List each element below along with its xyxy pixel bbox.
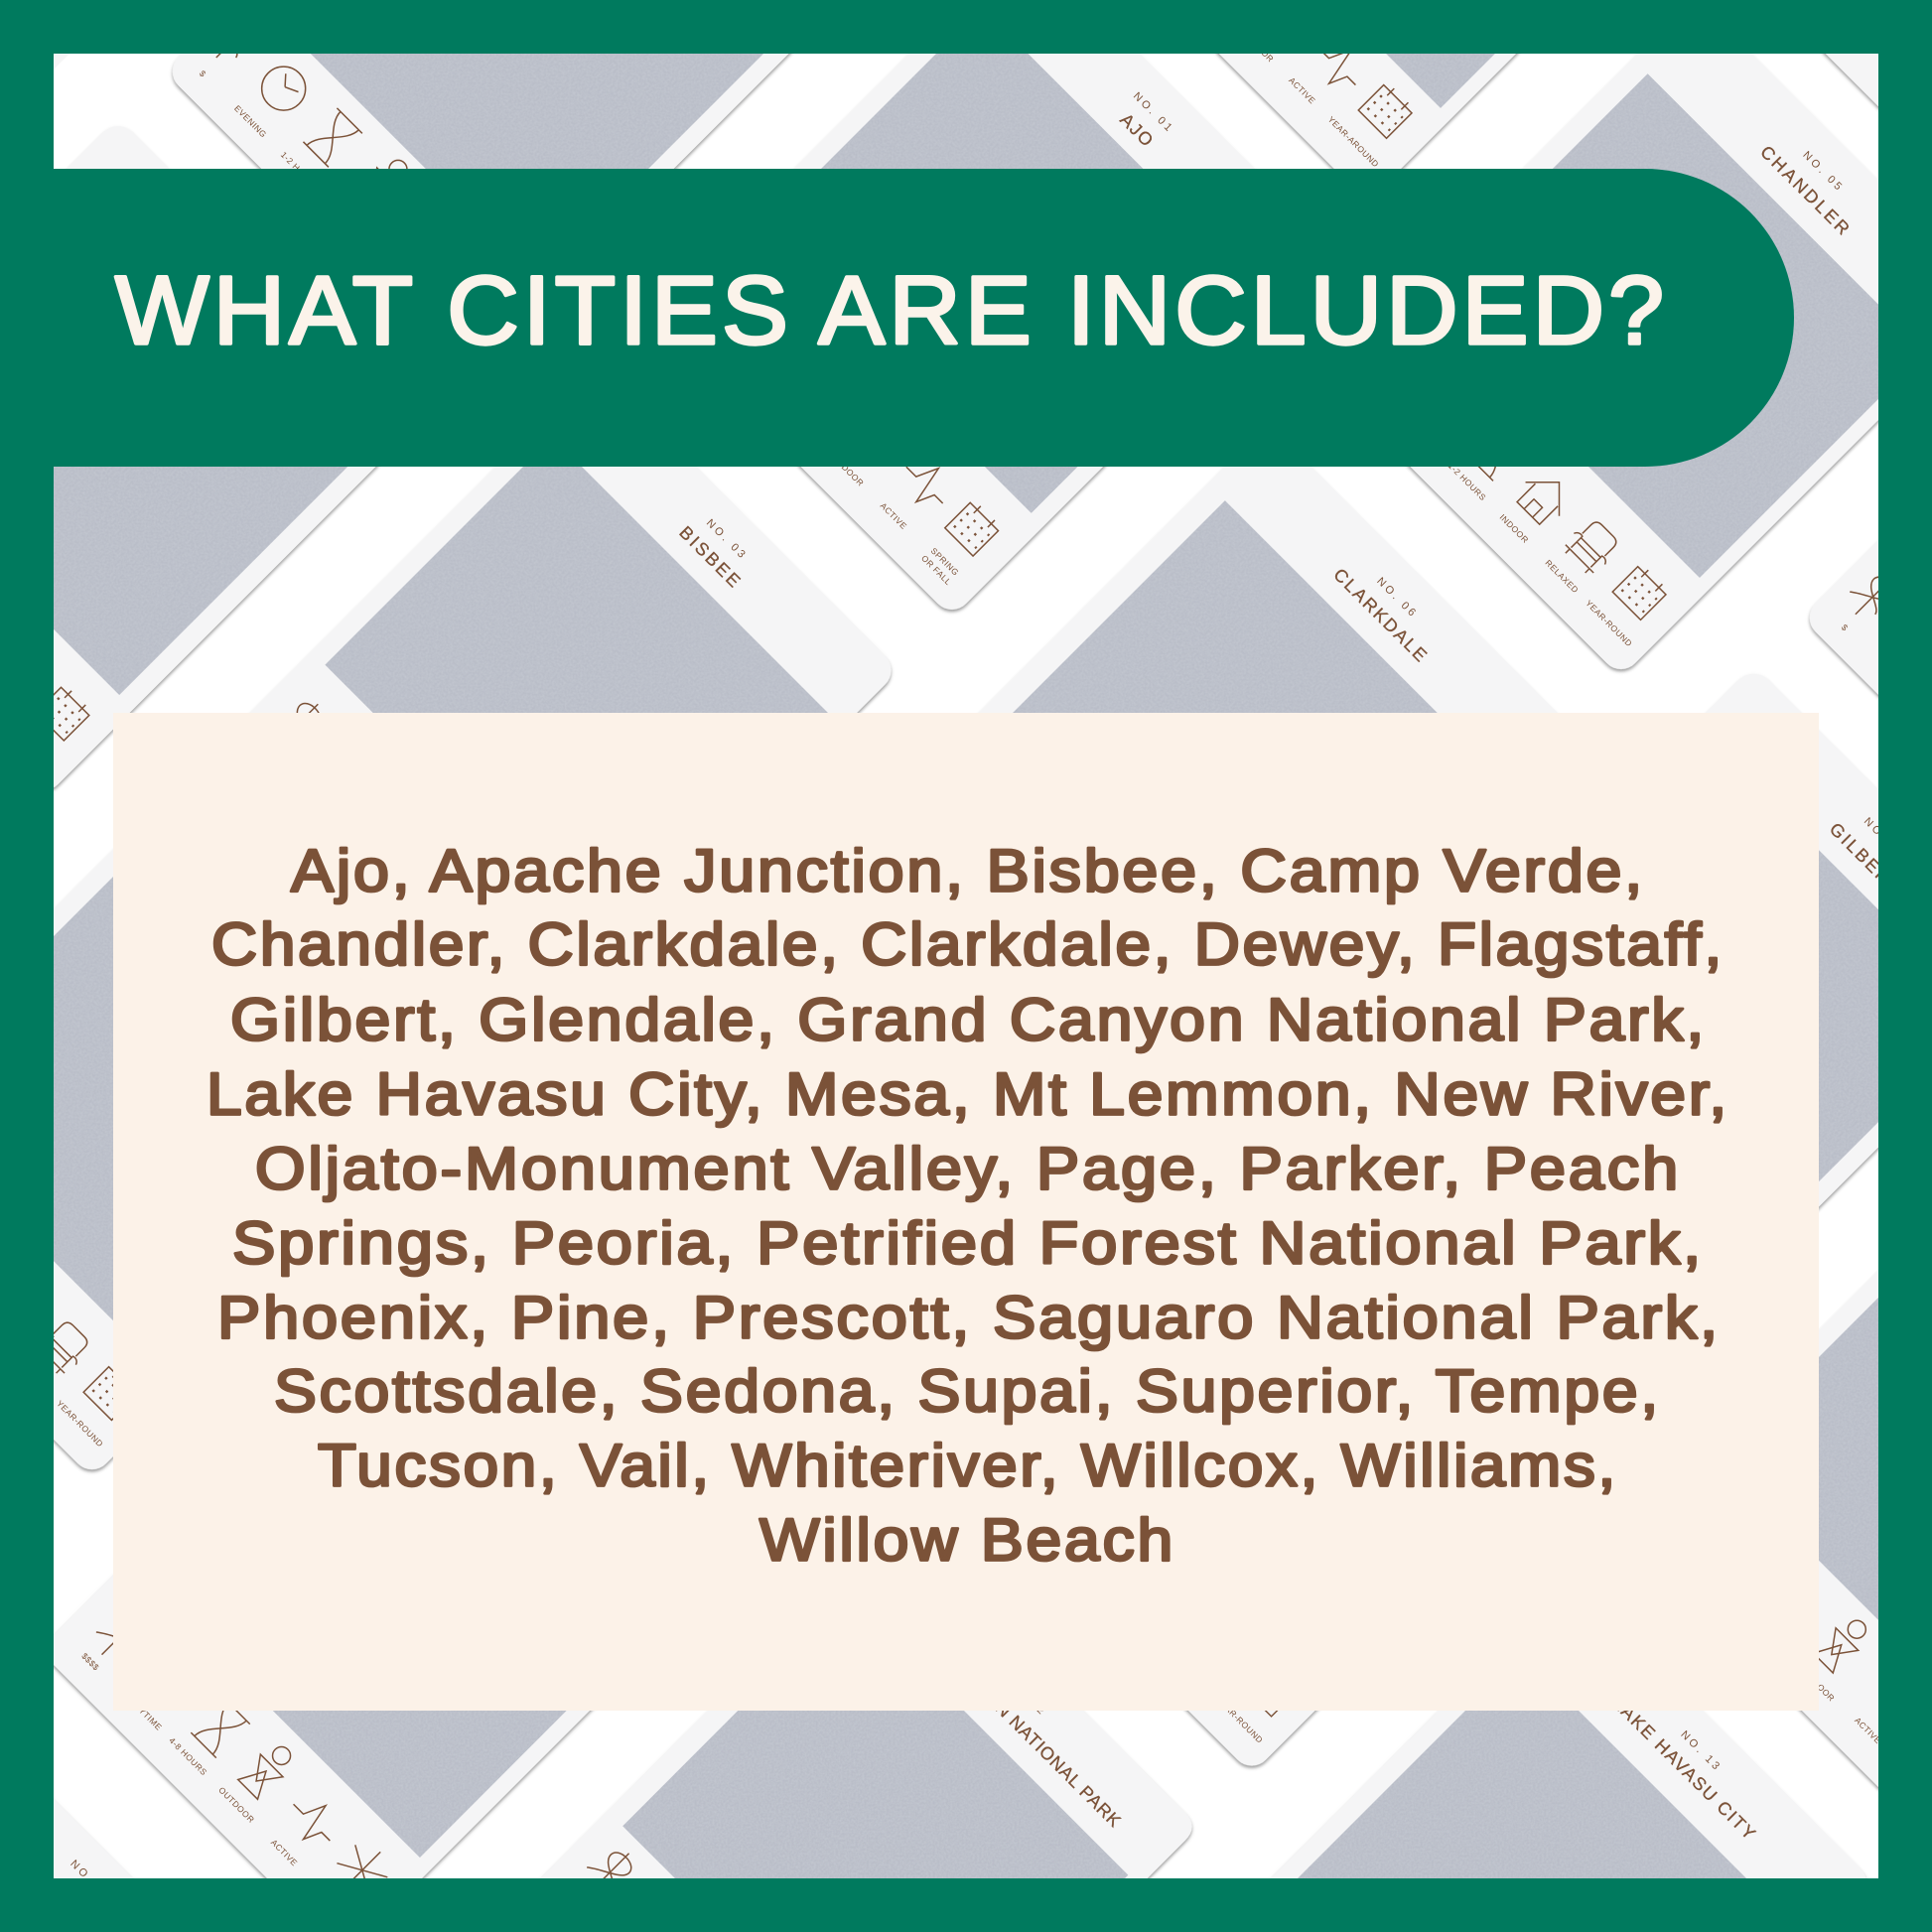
card: year-round tip, bottom: YEAR-ROUND: [1214, 1695, 1265, 1745]
text block: cities: Phoenix, Pine, Prescott, Saguaro National Park,: [217, 1285, 1721, 1350]
card: No. 10 Gilbert: [1706, 673, 1878, 1212]
card: outdoor active, bottom left: ACTIVE: [269, 1838, 300, 1868]
card: top right corner: [1821, 54, 1878, 111]
card: No. 05 Chandler: NO. 05: [1800, 149, 1846, 195]
card: No. 05 Chandler: [1405, 54, 1878, 673]
card: outdoor active, right edge: ACTIVE: [1853, 1716, 1883, 1745]
card: No. 06 Clarkdale: [979, 467, 1557, 713]
card: No. 03 Bisbee: BISBEE: [675, 522, 745, 591]
card: evening activity: 1-2 HOURS: [279, 150, 321, 192]
card: No. 01 Ajo: [794, 54, 1255, 614]
card: No. 01 Ajo: OR FALL: [919, 553, 953, 587]
card: No. 05 Chandler: RELAXED: [1544, 558, 1581, 595]
card: No. 12 Grand Canyon National Park: [540, 1711, 1193, 1878]
card: outdoor active, bottom left: OUTDOOR: [216, 1785, 256, 1825]
card: No. 09, bottom left corner: NO. 09: [68, 1858, 113, 1903]
card: No. 13 Lake Havasu City: [1271, 1711, 1867, 1878]
card: year-round tip, bottom: [1183, 1711, 1320, 1770]
card: right column, money icon: $: [1840, 622, 1851, 633]
text block: cities: Springs, Peoria, Petrified Forest National Park,: [232, 1209, 1704, 1277]
card: No. 10 Gilbert: NO. 10: [1862, 815, 1907, 861]
card: outdoor active, bottom left: $$$$: [79, 1651, 101, 1673]
text block: cities: Gilbert, Glendale, Grand Canyon National Park,: [230, 987, 1707, 1052]
text block: cities: Ajo, Apache Junction, Bisbee, Camp Verde,: [291, 838, 1645, 903]
card: evening activity: [171, 54, 794, 169]
card: No. 13 Lake Havasu City: NO. 13: [1678, 1728, 1724, 1774]
card: No. 12 Grand Canyon National Park: NO. 12: [1004, 1673, 1049, 1719]
card: No. 09, bottom left corner: [54, 1799, 133, 1878]
card: evening activity: EVENING: [232, 103, 269, 140]
card: outdoor active, bottom left: ANYTIME: [128, 1697, 164, 1732]
card: evening activity: $: [198, 69, 208, 79]
card: outdoor active, right edge: OUTDOOR: [1797, 1664, 1837, 1704]
card: outdoor active, bottom left: 4-8 HOURS: [167, 1735, 209, 1777]
card: No. 05 Chandler: 1-2 HOURS: [1447, 461, 1488, 502]
card: No. 13 Lake Havasu City: LAKE HAVASU CITY: [1609, 1694, 1759, 1844]
text block: cities: Tucson, Vail, Whiteriver, Willcox, Williams,: [318, 1432, 1618, 1499]
card: left column, lower: [54, 126, 381, 792]
card: No. 05 Chandler: INDOOR: [1498, 512, 1531, 545]
text block: cities: Lake Havasu City, Mesa, Mt Lemmon, New River,: [207, 1060, 1729, 1128]
text block: cities: [207, 838, 1729, 1573]
card: outdoor active, right edge: [1797, 1271, 1878, 1792]
card: No. 01 Ajo: NO. 01: [1131, 90, 1176, 136]
card: year-around: ACTIVE: [1287, 75, 1317, 106]
card: No. 01 Ajo: OUTDOOR: [826, 449, 866, 488]
text block: cities: Chandler, Clarkdale, Clarkdale, Dewey, Flagstaff,: [211, 911, 1725, 977]
card: No. 12 Grand Canyon National Park: GRAND CANYON NATIONAL PARK: [892, 1597, 1125, 1831]
text block: cities: Willow Beach: [759, 1507, 1175, 1573]
card: No. 01 Ajo: AJO: [1116, 109, 1157, 150]
card: year-around: [1213, 54, 1521, 169]
card: No. 03 Bisbee: NO. 03: [704, 517, 750, 563]
card: No. 01 Ajo: ACTIVE: [879, 500, 909, 531]
card: outdoor active, bottom left: [54, 1575, 595, 1878]
title: WHAT CITIES ARE INCLUDED?: [115, 256, 1668, 364]
text block: cities: Scottsdale, Sedona, Supai, Superior, Tempe,: [274, 1358, 1661, 1424]
card: year-around: OUTDOOR: [1236, 24, 1276, 65]
text block: cities: Oljato-Monument Valley, Page, Parker, Peach: [255, 1136, 1681, 1201]
banner: title ribbon: [0, 169, 1794, 467]
card: left column, armchair: YEAR-ROUND: [55, 1399, 105, 1449]
card: No. 06 Clarkdale: NO. 06: [1374, 576, 1420, 621]
card: No. 10 Gilbert: GILBERT: [1826, 819, 1903, 897]
card: year-around: YEAR-AROUND: [1326, 114, 1381, 170]
card: No. 06 Clarkdale: CLARKDALE: [1329, 565, 1431, 665]
card: No. 01 Ajo: SPRING: [929, 546, 961, 578]
card: right column, money icon: [1807, 540, 1878, 700]
panel: city list: [113, 713, 1819, 1711]
card: No. 05 Chandler: YEAR-ROUND: [1584, 598, 1634, 648]
card: left column, armchair: [54, 850, 113, 1473]
card: No. 05 Chandler: CHANDLER: [1756, 142, 1854, 238]
card: No. 03 Bisbee: [250, 467, 894, 713]
